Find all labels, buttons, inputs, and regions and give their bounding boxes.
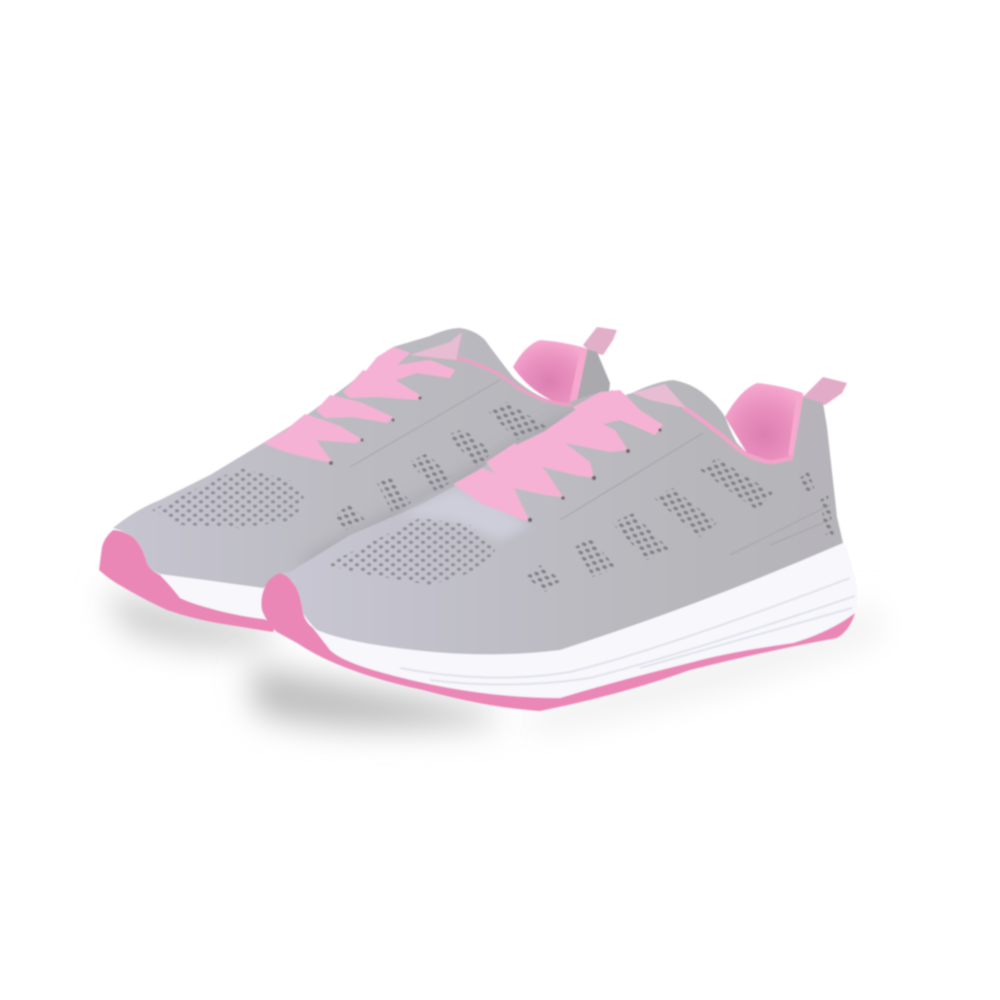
ground shadows <box>105 590 880 730</box>
left shoe pink toe and outsole <box>99 530 277 632</box>
right shoe pink lining <box>725 383 803 462</box>
left shoe pink lining <box>513 340 585 404</box>
left shoe eyelets <box>329 396 422 465</box>
left shoe heel <box>575 348 610 410</box>
right shoe upper <box>280 380 843 654</box>
left shoe upper <box>113 328 610 588</box>
right shoe midsole ribs <box>400 578 855 685</box>
left shoe tongue label <box>410 332 462 360</box>
right shoe collar piping <box>683 407 793 462</box>
left shoe toe mesh panel <box>152 468 304 528</box>
right shoe <box>261 377 857 711</box>
right shoe heel tab <box>803 377 847 405</box>
left shoe white midsole <box>155 570 268 622</box>
right shoe white midsole <box>310 540 857 703</box>
left shoe heel tab <box>583 327 617 355</box>
left shoe contact shadow from right shoe <box>300 405 580 575</box>
left shoe <box>99 327 617 632</box>
left shoe laces <box>263 347 455 462</box>
right shoe laces <box>453 390 663 522</box>
right shoe light vamp highlight <box>400 488 530 540</box>
left shoe stitching <box>350 380 500 467</box>
left shoe side mesh panels <box>333 402 547 530</box>
right shoe side mesh panels <box>526 458 834 592</box>
right shoe pink toe and outsole <box>261 573 855 711</box>
left shoe collar piping <box>453 357 572 405</box>
right shoe stitching <box>560 433 830 555</box>
right shoe toe mesh panel <box>325 518 497 585</box>
right shoe tongue label <box>632 384 686 408</box>
right shoe eyelets <box>528 428 662 522</box>
